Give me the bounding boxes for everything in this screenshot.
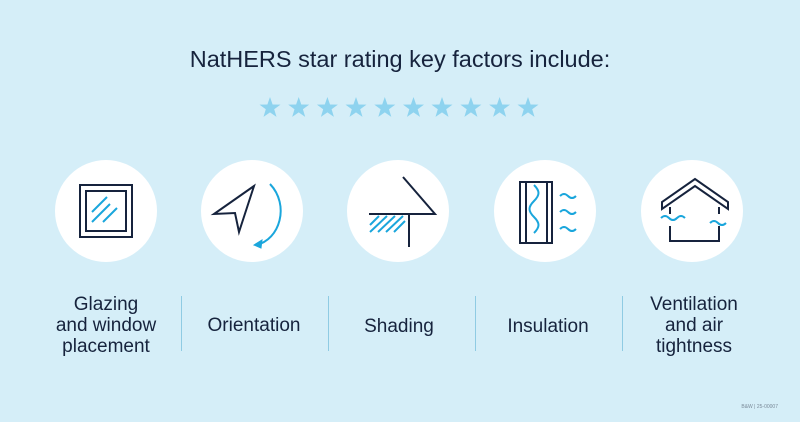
label: insulation: Insulation [507,316,589,337]
label: ventilation [650,294,738,357]
label: glazing: and window [56,315,156,336]
label: orientation: Orientation [208,315,300,336]
label: shading: Shading [364,316,434,337]
label: glazing: placement [62,336,150,357]
label: ventilation: tightness [656,336,732,357]
label: glazing [56,294,156,357]
icon: orientation [201,160,303,262]
icon: window [55,160,157,262]
label: glazing: Glazing [74,294,138,315]
stars row [260,97,538,117]
title: NatHERS star rating key factors include: [190,46,610,72]
footer code: B&W | 25-00007 [741,404,778,410]
label: ventilation: and air [665,315,723,336]
icon: house [641,160,743,262]
icon: insulation [494,160,596,262]
label: ventilation: Ventilation [650,294,738,315]
icon: shading [347,160,449,262]
